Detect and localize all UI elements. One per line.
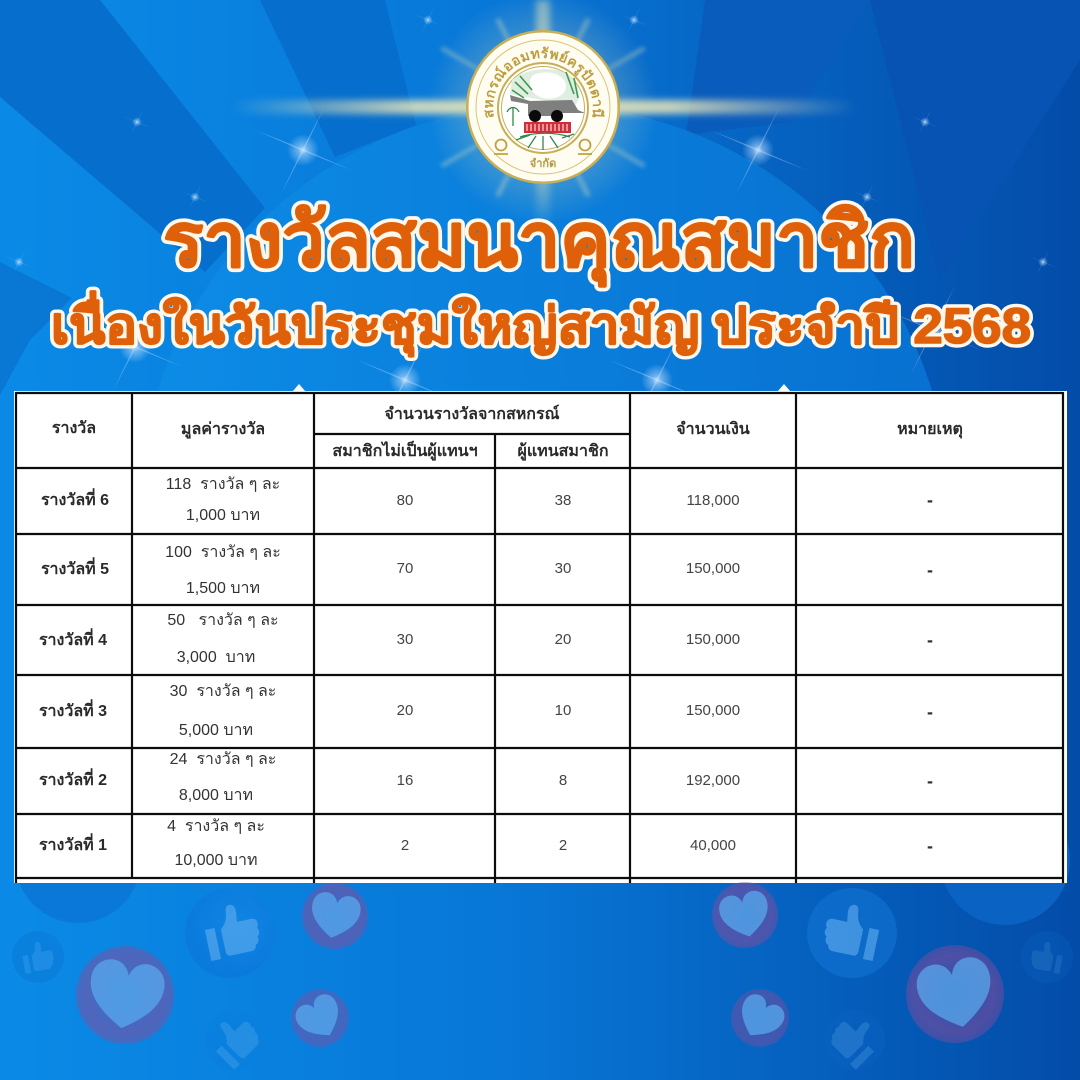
row: prize 6: 38: [555, 492, 571, 509]
row: prize 4: 150,000: [686, 631, 740, 648]
row: prize 4: รางวัลที่ 4: [39, 628, 107, 649]
row: prize 1: 4 รางวัล ๆ ละ: [167, 818, 265, 835]
row: prize 2: [39, 751, 933, 804]
row: prize 1: 10,000 บาท: [174, 852, 258, 869]
icon: faint thumb bubble: [205, 1009, 265, 1070]
row: prize 3: 20: [397, 702, 413, 719]
title: [51, 198, 1031, 357]
seal small emblems: [494, 140, 592, 154]
decorative bubbles left: [12, 883, 368, 1070]
light burst behind logo: [230, 0, 856, 230]
row: prize 2: 8,000 บาท: [179, 787, 253, 804]
icon: faint thumb bubble: [12, 931, 64, 983]
row: prize 1: [39, 818, 933, 869]
icon: thumb bubble: [185, 888, 275, 978]
row: prize 3: -: [927, 702, 933, 722]
row: prize 6: 118,000: [686, 492, 740, 509]
icon: heart bubble: [76, 946, 174, 1044]
seal text: สหกรณ์ออมทรัพย์ครูปัตตานี: [484, 46, 605, 118]
row: prize 2: 24 รางวัล ๆ ละ: [170, 751, 276, 768]
icon: heart bubble: [906, 945, 1004, 1043]
row: prize 6: 118 รางวัล ๆ ละ: [166, 476, 280, 493]
row: prize 1: รางวัลที่ 1: [39, 833, 107, 854]
row: prize 1: 2: [401, 837, 409, 854]
row: prize 5: 30: [555, 560, 571, 577]
table: [14, 384, 1067, 883]
row: prize 3: 5,000 บาท: [179, 722, 253, 739]
row: prize 6: [41, 476, 933, 524]
row: prize 5: 150,000: [686, 560, 740, 577]
row: prize 1: -: [927, 836, 933, 856]
row: prize 4: 20: [555, 631, 571, 648]
row: prize 6: รางวัลที่ 6: [41, 488, 109, 509]
row: prize 3: 10: [555, 702, 571, 719]
row: prize 2: รางวัลที่ 2: [39, 768, 107, 789]
icon: faint thumb bubble: [1021, 931, 1073, 983]
row: prize 5: 100 รางวัล ๆ ละ: [165, 544, 281, 561]
table grid: [16, 392, 1063, 883]
row: prize 4: [39, 612, 933, 666]
row: prize 4: 30: [397, 631, 413, 648]
row: prize 4: -: [927, 630, 933, 650]
row: prize 3: 30 รางวัล ๆ ละ: [170, 683, 276, 700]
row: prize 6: 1,000 บาท: [186, 507, 260, 524]
row: prize 3: [39, 683, 933, 739]
seal text: จำกัด: [530, 157, 556, 170]
logo: cooperative seal: [466, 30, 620, 184]
table header: สมาชิกไม่เป็นผู้แทนฯ: [332, 439, 478, 462]
decorative bubbles right: [712, 882, 1073, 1070]
table header: จำนวนเงิน: [676, 420, 750, 438]
row: prize 3: 150,000: [686, 702, 740, 719]
seal text: [484, 46, 605, 170]
table header: [52, 404, 963, 462]
row: prize 1: 40,000: [690, 837, 736, 854]
row: prize 6: 80: [397, 492, 413, 509]
row: prize 5: 70: [397, 560, 413, 577]
row: prize 6: -: [927, 490, 933, 510]
row: prize 1: 2: [559, 837, 567, 854]
title line 1: รางวัลสมนาคุณสมาชิก: [163, 198, 915, 287]
row: prize 2: 192,000: [686, 772, 740, 789]
icon: thumb bubble: [807, 888, 897, 978]
table header: มูลค่ารางวัล: [181, 420, 265, 440]
title line 2: เนื่องในวันประชุมใหญ่สามัญ ประจำปี 2568: [51, 291, 1031, 357]
row: prize 2: 8: [559, 772, 567, 789]
seal inner emblem: [498, 63, 588, 153]
table header: จำนวนรางวัลจากสหกรณ์: [385, 404, 560, 423]
row: prize 5: -: [927, 560, 933, 580]
sparkle stars: [5, 7, 1057, 424]
title line 1: รางวัลสมนาคุณสมาชิก: [163, 198, 915, 287]
row: prize 5: [41, 544, 933, 597]
title line 2: เนื่องในวันประชุมใหญ่สามัญ ประจำปี 2568: [51, 291, 1031, 357]
icon: heart bubble: [302, 883, 368, 949]
table header: รางวัล: [52, 419, 96, 437]
icon: faint thumb bubble: [825, 1009, 885, 1070]
row: prize 4: 3,000 บาท: [177, 649, 255, 666]
table header: หมายเหตุ: [897, 421, 963, 439]
row: prize 5: 1,500 บาท: [186, 580, 260, 597]
icon: heart bubble: [712, 882, 778, 948]
row: prize 5: รางวัลที่ 5: [41, 557, 109, 578]
icon: heart bubble: [731, 989, 789, 1047]
row: prize 2: 16: [397, 772, 413, 789]
table header: ผู้แทนสมาชิก: [517, 442, 609, 462]
row: prize 2: -: [927, 771, 933, 791]
icon: heart bubble: [291, 989, 349, 1047]
large circles behind table: [15, 795, 1070, 925]
row: prize 3: รางวัลที่ 3: [39, 699, 107, 720]
row: prize 4: 50 รางวัล ๆ ละ: [167, 612, 279, 629]
